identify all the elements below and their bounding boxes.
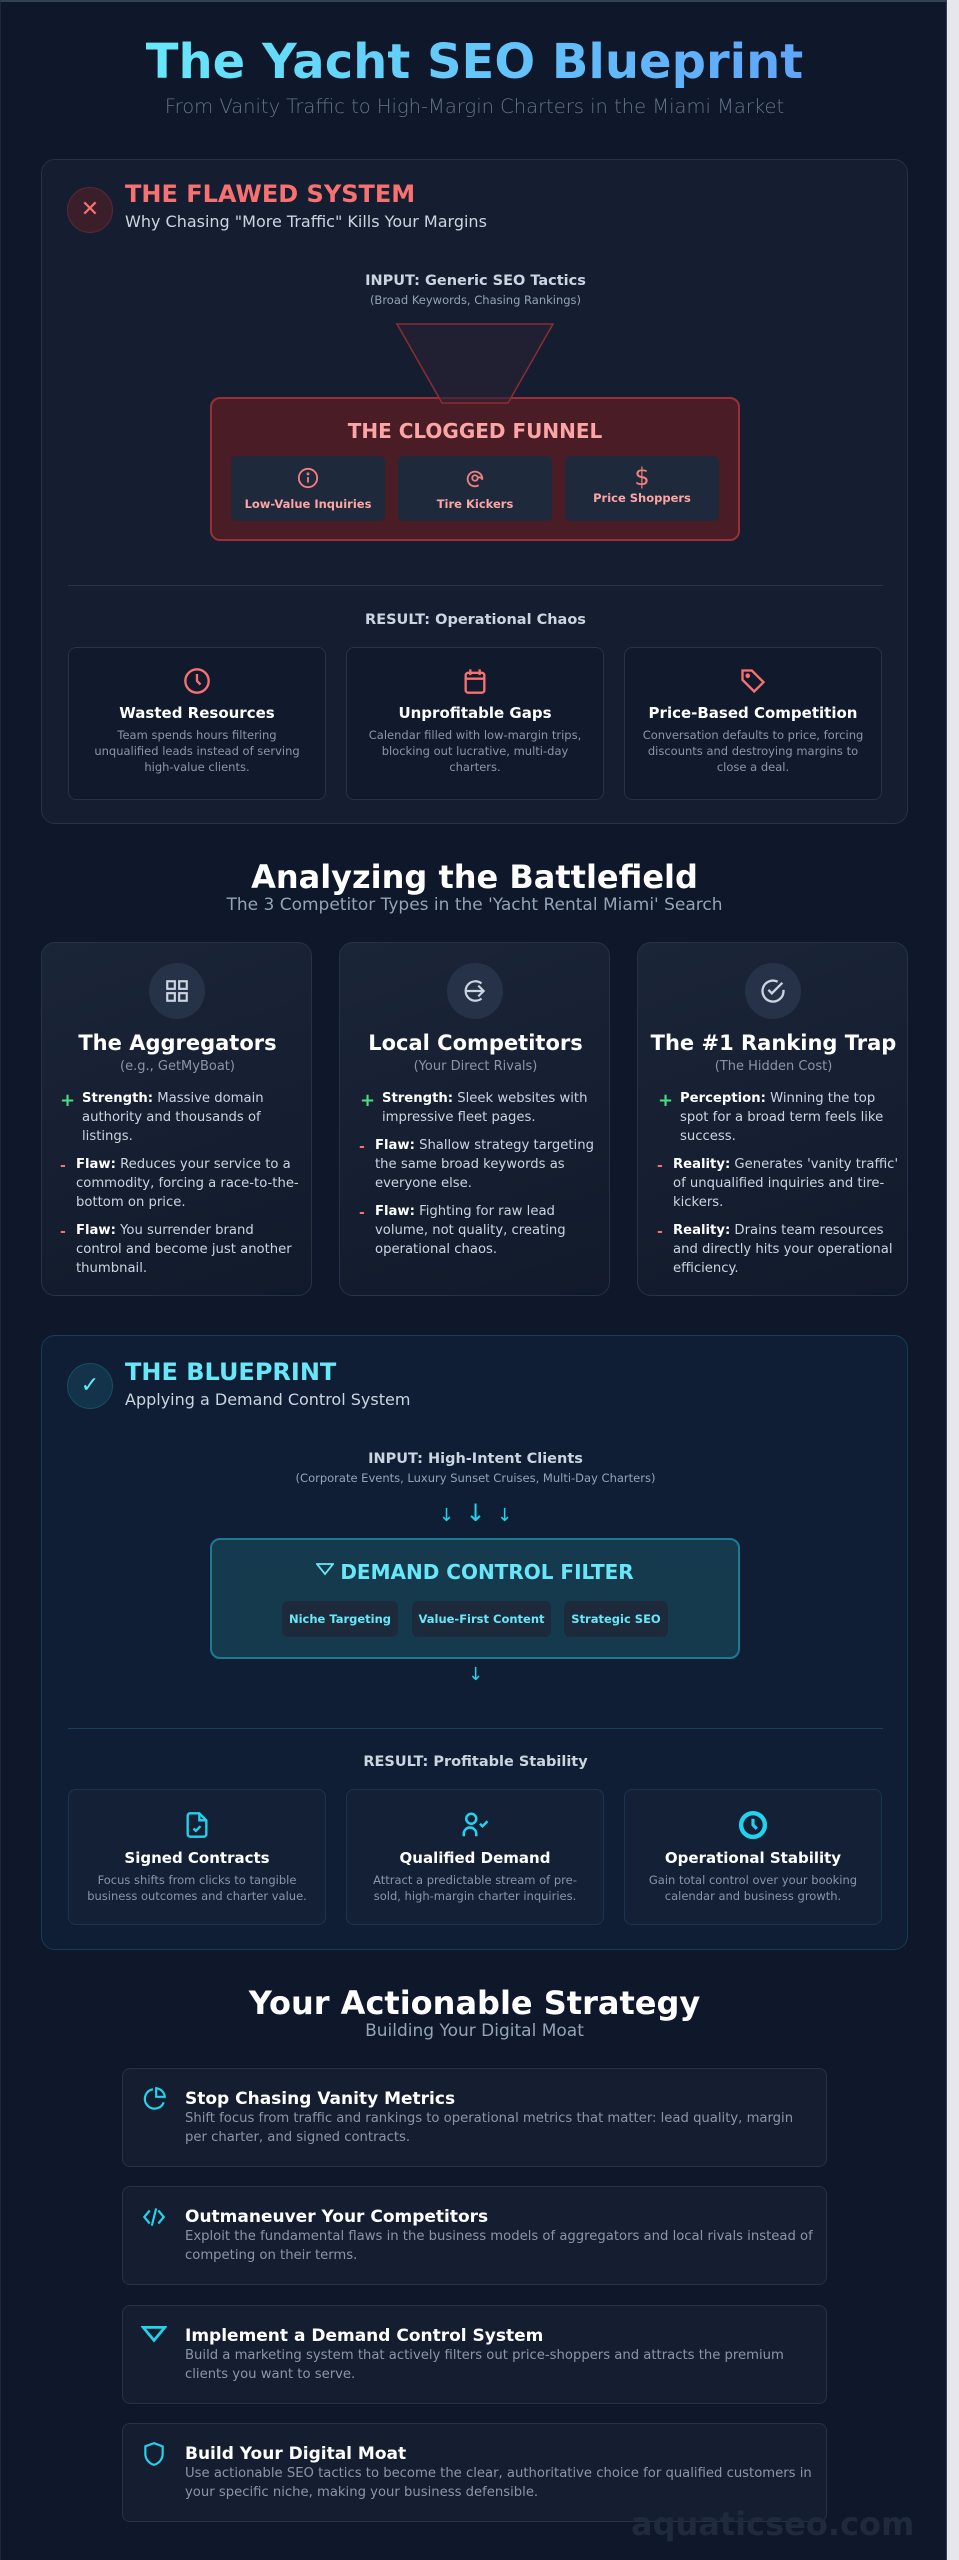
funnel shape [396, 323, 554, 404]
strategy card 1: Stop Chasing Vanity Metrics [185, 2089, 455, 2109]
panel: local competitors: Flaw: Fighting for raw lead volume, not quality, creating operational chaos. [375, 1204, 566, 1257]
input label [365, 273, 586, 307]
panel: aggregators: - [60, 1158, 66, 1174]
panel: the flawed system [41, 159, 908, 824]
panel: aggregators: - [60, 1224, 66, 1240]
chip: value-first content: Value-First Content [418, 1612, 545, 1626]
panel: ranking trap: Reality: Generates 'vanity traffic' of unqualified inquiries and tire-kickers. [673, 1157, 898, 1210]
result label: RESULT: Operational Chaos [365, 612, 586, 628]
bullet list [60, 1090, 299, 1276]
input label [296, 1451, 655, 1485]
clogged funnel title: THE CLOGGED FUNNEL [348, 419, 602, 443]
subheading: Building Your Digital Moat [365, 2021, 584, 2041]
card: wasted resources [68, 647, 326, 800]
clogged funnel box [210, 397, 740, 541]
panel: local competitors: - [359, 1205, 365, 1221]
panel: ranking trap: (The Hidden Cost) [715, 1059, 832, 1074]
item: low-value inquiries [231, 456, 385, 521]
panel: local competitors: (Your Direct Rivals) [414, 1059, 537, 1074]
item: price shoppers [565, 456, 719, 521]
card: signed contracts: Signed Contracts [124, 1849, 270, 1867]
icon: check [67, 1363, 113, 1409]
panel: the blueprint [41, 1335, 908, 1950]
panel: aggregators: + [60, 1090, 75, 1111]
subheading: competitor types: The 3 Competitor Types in the 'Yacht Rental Miami' Search [226, 895, 723, 915]
card: wasted resources: Team spends hours filtering unqualified leads instead of serving high-value clients. [94, 728, 300, 774]
panel: aggregators: Strength: Massive domain authority and thousands of listings. [82, 1091, 264, 1144]
card: signed contracts: Focus shifts from clicks to tangible business outcomes and charter value. [87, 1873, 307, 1903]
heading: actionable strategy: Your Actionable Strategy [249, 1984, 700, 2022]
panel: aggregators: Flaw: Reduces your service to a commodity, forcing a race-to-the-bottom on price. [76, 1157, 299, 1210]
card: signed contracts [68, 1789, 326, 1925]
strategy card 4: Build Your Digital Moat [185, 2444, 406, 2464]
card: unprofitable gaps [346, 647, 604, 800]
arrow: down: ↓ [468, 1664, 483, 1685]
icon: arrow circle [447, 963, 503, 1019]
strategy card 3: Implement a Demand Control System [185, 2326, 543, 2346]
icon: x circle: ✕ [81, 197, 99, 222]
subheading: Applying a Demand Control System [125, 1390, 410, 1409]
arrows: down: ↓ ↓ ↓ [439, 1499, 512, 1527]
card: qualified demand: Qualified Demand [400, 1849, 550, 1867]
input label: INPUT: High-Intent Clients [368, 1451, 583, 1467]
panel: ranking trap: + [658, 1090, 673, 1111]
card: price-based competition [624, 647, 882, 800]
chip: strategic seo: Strategic SEO [571, 1612, 661, 1626]
result label: RESULT: Profitable Stability [363, 1754, 588, 1770]
panel: local competitors: Flaw: Shallow strategy targeting the same broad keywords as everyone else. [375, 1138, 594, 1191]
item: price shoppers: $ [634, 463, 650, 491]
strategy card 3: Build a marketing system that actively filters out price-shoppers and attracts the premium clients you want to serve. [185, 2348, 784, 2382]
strategy card 4: Use actionable SEO tactics to become the clear, authoritative choice for qualified customers in your specific niche, making your business defensible. [185, 2466, 812, 2500]
filter box [210, 1538, 740, 1659]
panel: ranking trap: Perception: Winning the top spot for a broad term feels like success. [680, 1091, 883, 1144]
strategy card 2: Exploit the fundamental flaws in the business models of aggregators and local rivals instead of competing on their terms. [185, 2229, 813, 2263]
card: operational stability: Gain total control over your booking calendar and business growth. [649, 1873, 857, 1903]
panel: aggregators [41, 942, 312, 1296]
icon: check circle [745, 963, 801, 1019]
panel: ranking trap [637, 942, 908, 1296]
icon: pie chart [144, 2087, 166, 2110]
chip: niche targeting [282, 1601, 398, 1637]
card title: The #1 Ranking Trap [651, 1031, 896, 1055]
bullet list [359, 1090, 594, 1257]
card: unprofitable gaps: Calendar filled with low-margin trips, blocking out lucrative, multi-day charters. [369, 728, 581, 774]
subheading: Why Chasing "More Traffic" Kills Your Margins [125, 212, 487, 231]
icon: x circle [67, 187, 113, 233]
strategy card 2 [122, 2186, 827, 2285]
heading: flawed system: THE FLAWED SYSTEM [125, 180, 415, 208]
panel: local competitors: - [359, 1139, 365, 1155]
panel: ranking trap: - [657, 1224, 663, 1240]
filter title: DEMAND CONTROL FILTER [340, 1560, 634, 1584]
panel: local competitors: Strength: Sleek websites with impressive fleet pages. [382, 1091, 587, 1125]
panel: local competitors [339, 942, 610, 1296]
card: unprofitable gaps: Unprofitable Gaps [398, 704, 552, 722]
card: operational stability: Operational Stability [665, 1849, 841, 1867]
card: price-based competition: Price-Based Competition [649, 704, 857, 722]
card: qualified demand [346, 1789, 604, 1925]
item: price shoppers: Price Shoppers [593, 491, 691, 505]
card: price-based competition: Conversation defaults to price, forcing discounts and destroying margins to close a deal. [643, 728, 863, 774]
strategy card 1 [122, 2068, 827, 2167]
strategy card 2: Outmaneuver Your Competitors [185, 2207, 488, 2227]
strategy card 1: Shift focus from traffic and rankings to operational metrics that matter: lead quality, margin per charter, and signed contracts. [185, 2111, 793, 2145]
input label: INPUT: Generic SEO Tactics [365, 273, 586, 289]
item: low-value inquiries: Low-Value Inquiries [245, 497, 371, 511]
watermark: aquaticseo.com [631, 2505, 914, 2543]
panel: ranking trap: Reality: Drains team resources and directly hits your operational efficiency. [673, 1223, 893, 1276]
chip: value-first content [412, 1601, 551, 1637]
card: qualified demand: Attract a predictable stream of pre-sold, high-margin charter inquiries. [373, 1873, 577, 1903]
panel: aggregators: Flaw: You surrender brand control and become just another thumbnail. [76, 1223, 292, 1276]
title: The Yacht SEO Blueprint [146, 34, 803, 90]
icon: grid [149, 963, 205, 1019]
heading: analyzing the battlefield: Analyzing the Battlefield [251, 858, 698, 896]
heading: the blueprint: THE BLUEPRINT [125, 1358, 336, 1386]
strategy card 3 [122, 2305, 827, 2404]
bullet list [657, 1090, 898, 1276]
chip: strategic seo [564, 1601, 668, 1637]
card title: Local Competitors [368, 1031, 583, 1055]
subtitle: From Vanity Traffic to High-Margin Charters in the Miami Market [165, 95, 784, 118]
icon: shield [144, 2442, 164, 2466]
panel: ranking trap: - [657, 1158, 663, 1174]
panel: local competitors: + [360, 1090, 375, 1111]
card title: The Aggregators [78, 1031, 277, 1055]
icon: check: ✓ [81, 1373, 99, 1398]
icon: filter [141, 2326, 167, 2342]
strategy card 4 [122, 2423, 827, 2522]
item: tire kickers [398, 456, 552, 521]
icon: code brackets [142, 2208, 166, 2226]
input label: (Broad Keywords, Chasing Rankings) [370, 293, 581, 307]
panel: aggregators: (e.g., GetMyBoat) [120, 1059, 235, 1074]
chip: niche targeting: Niche Targeting [289, 1612, 391, 1626]
input label: (Corporate Events, Luxury Sunset Cruises, Multi-Day Charters) [296, 1471, 655, 1485]
item: tire kickers: Tire Kickers [437, 497, 513, 511]
card: operational stability [624, 1789, 882, 1925]
card: wasted resources: Wasted Resources [119, 704, 275, 722]
